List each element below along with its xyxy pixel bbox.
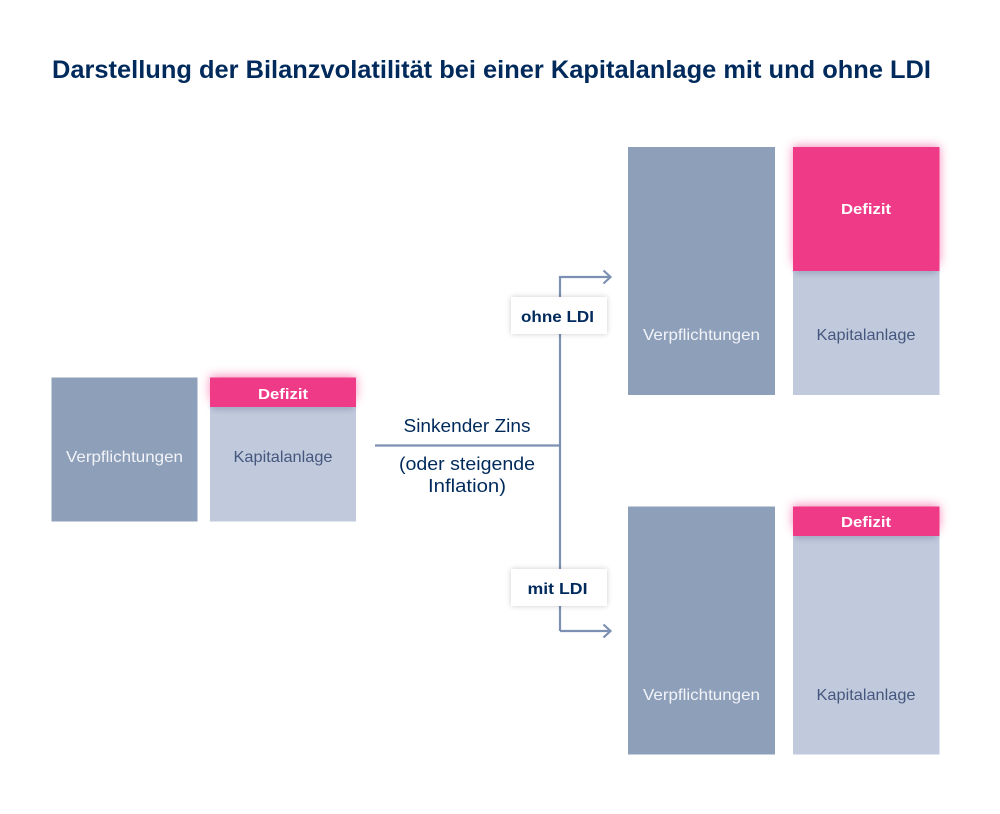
panel: outcome without LDI: [628, 146, 940, 395]
panel: outcome with LDI: [628, 505, 940, 754]
deficit with LDI: Defizit: [841, 514, 891, 531]
bar: assets without LDI: Kapitalanlage: [816, 327, 916, 344]
text: trigger below line: Inflation): [428, 476, 506, 496]
bar: assets with LDI: Kapitalanlage: [816, 687, 916, 704]
bar: liabilities without LDI: [628, 147, 775, 395]
text: trigger below line: (oder steigende: [399, 454, 535, 474]
label: mit LDI: [511, 569, 607, 606]
bar: liabilities with LDI: Verpflichtungen: [643, 687, 760, 704]
label: ohne LDI: ohne LDI: [521, 309, 594, 326]
bar: liabilities start: Verpflichtungen: [66, 449, 183, 466]
deficit with LDI: [793, 505, 940, 539]
bar: assets start: Kapitalanlage: [234, 449, 333, 466]
deficit start: Defizit: [258, 386, 308, 403]
deficit start: [210, 376, 356, 410]
text: trigger above line: Sinkender Zins: [404, 416, 530, 436]
title: Darstellung der Bilanzvolatilität bei einer Kapitalanlage mit und ohne LDI: [52, 56, 931, 84]
arrow: branching connector: [375, 270, 610, 638]
bar: liabilities start: [52, 378, 198, 522]
label: mit LDI: mit LDI: [528, 581, 588, 598]
panel: starting balance sheet: [52, 376, 356, 522]
bar: liabilities without LDI: Verpflichtungen: [643, 327, 760, 344]
bar: liabilities with LDI: [628, 506, 775, 754]
text: trigger below line: [399, 454, 535, 496]
deficit without LDI: Defizit: [841, 201, 891, 218]
bar: assets without LDI: [793, 147, 940, 395]
label: ohne LDI: [511, 297, 607, 334]
deficit without LDI: [793, 146, 940, 274]
bar: assets with LDI: [793, 506, 940, 754]
bar: assets start: [210, 378, 356, 522]
